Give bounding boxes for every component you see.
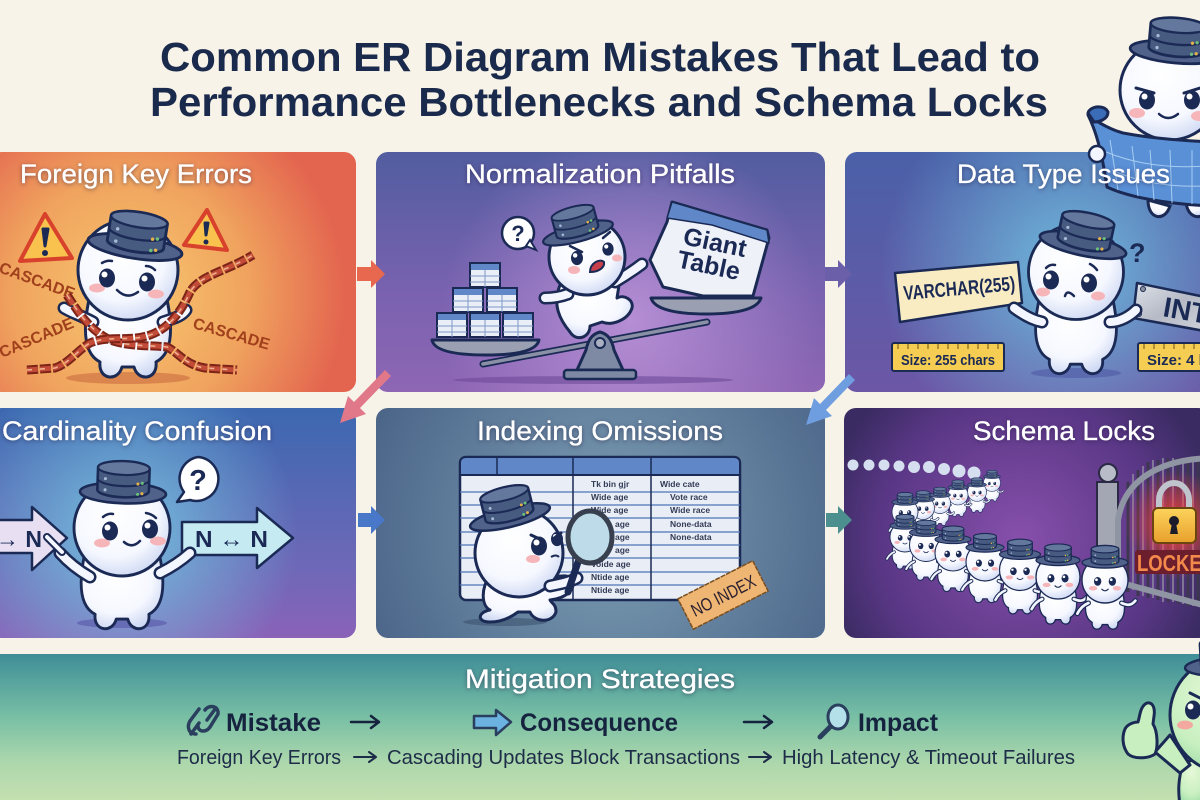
- heading: indexing omissions: Indexing Omissions: [477, 416, 723, 446]
- heading: mitigation strategies: Mitigation Strategies: [465, 664, 735, 694]
- heading: schema locks: Schema Locks: [973, 416, 1155, 446]
- data table: age: [615, 532, 630, 542]
- title: Performance Bottlenecks and Schema Locks: [150, 79, 1048, 125]
- arrow label: N to N: [182, 508, 293, 568]
- icon: thumbs up hand: [1123, 703, 1157, 758]
- data table: Ntide age: [591, 572, 630, 582]
- icon: question bubble: ?: [511, 221, 525, 246]
- small table stack: [437, 263, 533, 337]
- ruler: 255 chars: Size: 255 chars: [901, 352, 995, 369]
- icon: magnifier: [568, 511, 612, 592]
- mascot: confused: [1014, 204, 1136, 378]
- label: varchar: VARCHAR(255): [903, 273, 1016, 305]
- arrow: cardinality to indexing: [358, 506, 385, 534]
- arrow label: N to N: N ↔ N: [195, 526, 268, 552]
- data table: None-data: [670, 519, 712, 529]
- panel: foreign key errors: [0, 152, 356, 392]
- queue: distant mascots: [848, 460, 980, 480]
- title: Common ER Diagram Mistakes That Lead to: [160, 34, 1040, 80]
- arrow: mistake to consequence: [351, 716, 379, 728]
- arrow: consequence to impact: [744, 716, 772, 728]
- icon: warning triangle right: [184, 210, 227, 250]
- flow text: Foreign Key Errors: [177, 747, 341, 769]
- mascot: chained: [64, 205, 190, 384]
- mascot: thumbs up: [1123, 634, 1200, 800]
- ruler: 4 bytes: [1138, 343, 1200, 371]
- flow text: [177, 747, 1075, 769]
- data table: None-data: [670, 532, 712, 542]
- seesaw scale: [432, 298, 761, 384]
- chains: [27, 255, 253, 370]
- ruler: 255 chars: [892, 343, 1004, 371]
- heading: normalization pitfalls: Normalization Pitfalls: [465, 159, 735, 189]
- blueprint: [1088, 107, 1200, 206]
- panel: data type issues: [845, 152, 1200, 392]
- icon: warning triangle left: [20, 214, 72, 261]
- panel: schema locks: [844, 408, 1200, 638]
- arrow: normalization to cardinality: [340, 370, 391, 423]
- queue: front mascots: [887, 514, 1135, 629]
- queue: mid mascots: [889, 470, 1003, 540]
- giant table: Giant: [681, 222, 750, 263]
- panel: mitigation strategies: [0, 634, 1200, 800]
- arrow label: to N: [0, 507, 67, 570]
- data table: Voide age: [591, 559, 631, 569]
- flow text: High Latency & Timeout Failures: [782, 747, 1075, 769]
- mascot: corner with blueprint: [1088, 14, 1200, 217]
- icon: chain link: [188, 707, 218, 734]
- arrow: foreign key to normalization: [357, 260, 385, 288]
- arrow: indexing to schema locks: [826, 506, 852, 534]
- giant table: Table: [675, 245, 743, 286]
- data table: Ntide age: [591, 585, 630, 595]
- label: int: [1133, 283, 1200, 332]
- data table: Vote race: [670, 492, 708, 502]
- icon: question bubble: [502, 217, 536, 250]
- icon: question bubble: [177, 457, 218, 502]
- panel: cardinality confusion: [0, 408, 356, 638]
- icon: magnifier: [820, 705, 848, 737]
- heading: cardinality confusion: Cardinality Confusion: [2, 416, 272, 446]
- arrow: data type to indexing: [806, 374, 855, 425]
- mascot: pointing: [47, 460, 190, 629]
- mascot: struggling: [536, 198, 642, 338]
- icon: outlined arrow: [474, 710, 511, 735]
- flow text: Cascading Updates Block Transactions: [387, 747, 740, 769]
- data table: Wide race: [670, 505, 710, 515]
- title: [150, 34, 1048, 125]
- icon: question bubble: ?: [189, 465, 207, 497]
- panel: normalization pitfalls: [376, 152, 825, 392]
- arrow: normalization to data type: [825, 260, 852, 288]
- data table: Wide age: [591, 492, 629, 502]
- data table: [460, 457, 740, 600]
- label: mistake: Mistake: [226, 709, 321, 737]
- data table: Tk bin gjr: [591, 479, 630, 489]
- label: varchar: [895, 262, 1022, 322]
- mascot: inspector: [463, 478, 612, 626]
- icon: padlock: [1153, 483, 1196, 543]
- panel: indexing omissions: [376, 408, 825, 638]
- data table: age: [615, 545, 630, 555]
- data table: Wide cate: [660, 479, 700, 489]
- heading: foreign key errors: Foreign Key Errors: [20, 159, 252, 189]
- label: impact: Impact: [858, 709, 939, 737]
- label: consequence: Consequence: [520, 709, 678, 737]
- giant table: [650, 202, 769, 296]
- gate: [1097, 458, 1200, 607]
- tag: no index: NO INDEX: [688, 571, 759, 621]
- label: cascade right: CASCADE: [191, 316, 272, 354]
- data table: age: [615, 519, 630, 529]
- heading: data type issues: Data Type Issues: [957, 159, 1170, 189]
- icon: question mark: ?: [1129, 238, 1146, 268]
- data table: Wide age: [591, 505, 629, 515]
